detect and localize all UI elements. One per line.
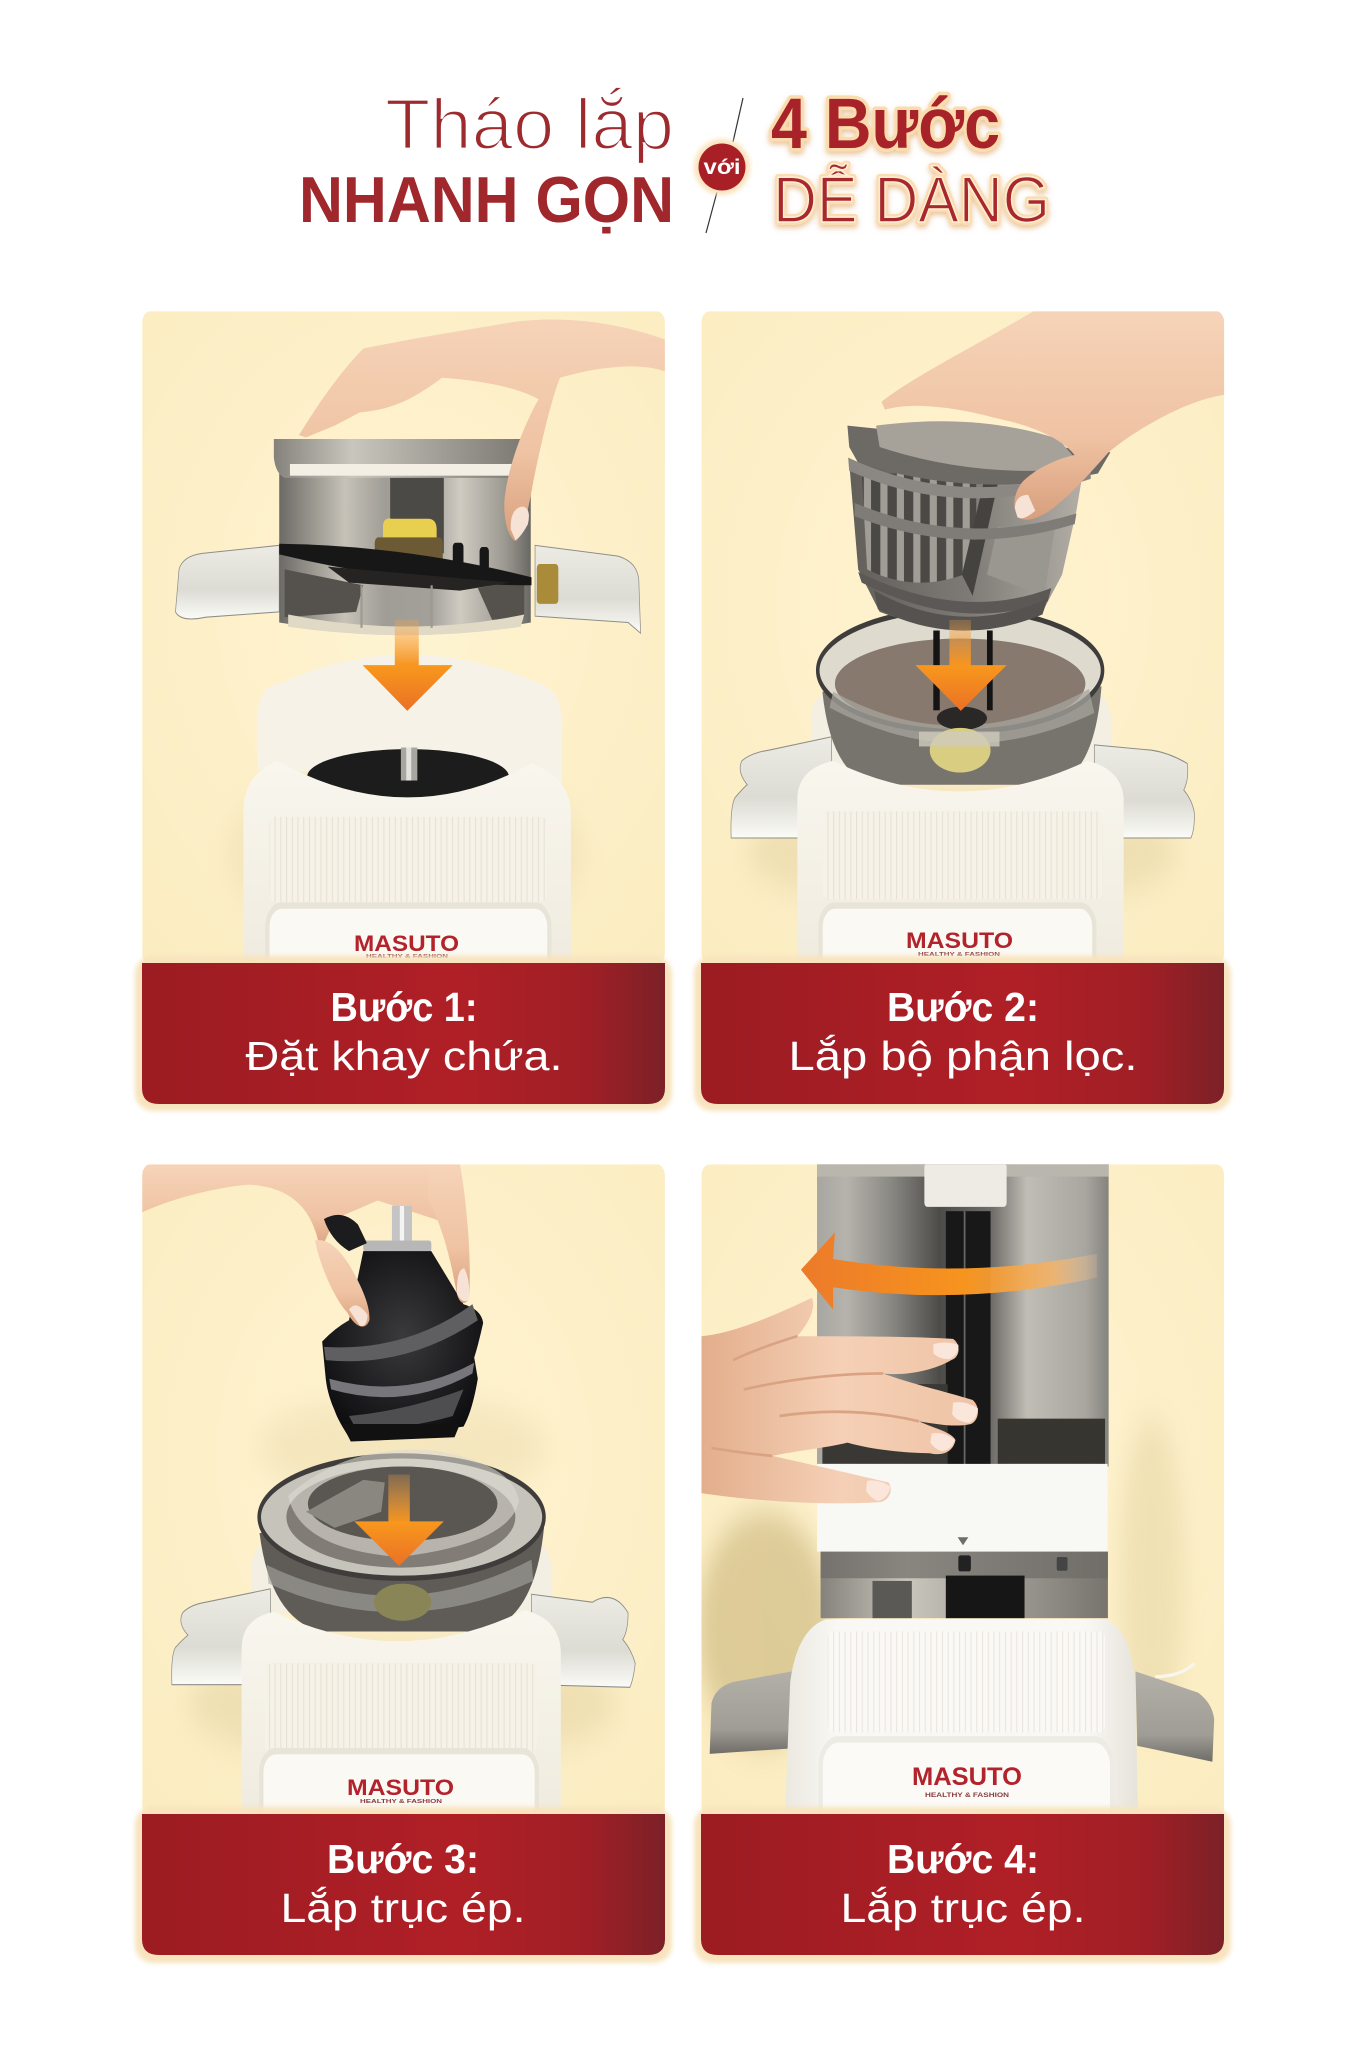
- left spout wing: [172, 1589, 272, 1685]
- right spout wing: [1094, 745, 1194, 838]
- label plate: [266, 902, 552, 956]
- left spout wing: [710, 1671, 792, 1754]
- label plate: [261, 1751, 537, 1831]
- machine front body: [785, 1619, 1138, 1820]
- white locking ring: [817, 1464, 1108, 1552]
- caption: step 4: Bước 4:: [887, 1836, 1039, 1882]
- heading: NHANH GỌN: NHANH GỌN: [299, 163, 674, 236]
- right finger: [436, 1166, 470, 1303]
- lower bowl: [818, 609, 1103, 785]
- ribbed panel: [823, 811, 1102, 899]
- machine front body: [243, 761, 571, 968]
- right spout wing: [1135, 1671, 1214, 1762]
- machine back wall: [258, 654, 562, 787]
- caption: step 4: Lắp trục ép.: [840, 1885, 1086, 1931]
- fingernails: [349, 1268, 469, 1326]
- product photo: step 1: [142, 311, 665, 980]
- caption: step 1: Bước 1:: [330, 984, 478, 1030]
- caption: step 3: Bước 3:: [327, 1836, 479, 1882]
- tray rim: [274, 439, 535, 478]
- caption: step 3: [135, 1807, 672, 1963]
- fingernails: [866, 1342, 978, 1501]
- fingernail: [511, 507, 529, 540]
- heading: DỄ DÀNG: DỄ DÀNG: [773, 163, 1050, 236]
- lock indicator: [958, 1537, 968, 1545]
- badge: với: [694, 139, 750, 195]
- caption: step 4: [694, 1807, 1231, 1963]
- label plate: [818, 902, 1096, 956]
- machine front body: [242, 1610, 561, 1820]
- caption: step 2: Lắp bộ phận lọc.: [788, 1033, 1138, 1079]
- black disc and spindle: [307, 748, 509, 798]
- panel: step 4: [694, 1163, 1231, 1963]
- product photo: step 4: [697, 1163, 1224, 1835]
- arrow: rotate left: [801, 1232, 1097, 1310]
- hand: [142, 1164, 438, 1242]
- logo: Masuto: HEALTHY & FASHION: [366, 954, 449, 960]
- machine back tabs: [812, 692, 1111, 766]
- lower glass: [821, 1552, 1108, 1618]
- logo: Masuto: MASUTO: [347, 1775, 454, 1800]
- lower bowl and inner ring: [259, 1450, 544, 1631]
- right spout wing: [535, 545, 641, 633]
- title: [299, 85, 1050, 236]
- panel: step 2: [694, 311, 1231, 1111]
- black disc: [279, 544, 531, 585]
- filter basket: [847, 421, 1110, 631]
- hand: [299, 320, 665, 541]
- panel: step 3: [135, 1164, 672, 1963]
- brass connector: [537, 564, 558, 604]
- arrow: down: [363, 620, 453, 711]
- divider slash top: [733, 98, 743, 142]
- logo: Masuto: HEALTHY & FASHION: [360, 1799, 443, 1805]
- caption: step 3: Lắp trục ép.: [280, 1885, 526, 1931]
- machine front body: [797, 761, 1124, 968]
- auger: [322, 1206, 483, 1442]
- logo: Masuto: HEALTHY & FASHION: [918, 952, 1001, 958]
- badge: với: với: [704, 156, 740, 179]
- divider slash bottom: [706, 192, 717, 233]
- heading: 4 Bước: 4 Bước: [771, 85, 1000, 164]
- ribbed panel: [265, 1663, 537, 1751]
- left spout wing: [175, 545, 279, 619]
- ribbed panel: [828, 1631, 1105, 1733]
- logo: Masuto: HEALTHY & FASHION: [925, 1793, 1009, 1799]
- heading: DỄ DÀNG: DỄ DÀNG: [773, 163, 1050, 236]
- caption: step 1: Đặt khay chứa.: [246, 1033, 562, 1079]
- hand: [881, 311, 1224, 520]
- logo: Masuto: MASUTO: [912, 1763, 1022, 1791]
- caption: step 2: [694, 956, 1231, 1111]
- yellow hub: [383, 518, 437, 538]
- hand: [701, 1298, 978, 1503]
- caption: step 1: [135, 956, 672, 1111]
- heading: Tháo lắp: Tháo lắp: [385, 86, 674, 165]
- label plate: [821, 1739, 1112, 1835]
- product photo: step 3: [142, 1164, 665, 1831]
- machine back tabs: [252, 1541, 552, 1613]
- arrow: down: [354, 1475, 444, 1566]
- right spout wing: [531, 1594, 635, 1687]
- caption: step 2: Bước 2:: [887, 984, 1039, 1030]
- logo: Masuto: MASUTO: [354, 931, 459, 956]
- arrow: down: [915, 620, 1007, 711]
- ribbed panel: [270, 817, 547, 902]
- tall juice cylinder: [817, 1163, 1109, 1467]
- panel: step 1: [135, 311, 672, 1111]
- tray body: [279, 466, 531, 634]
- fingernail: [1015, 495, 1035, 518]
- product photo: step 2: [701, 311, 1224, 980]
- logo: Masuto: MASUTO: [906, 928, 1013, 953]
- index finger: [315, 1240, 369, 1327]
- power cord: [1155, 1663, 1194, 1677]
- left spout wing: [731, 737, 833, 838]
